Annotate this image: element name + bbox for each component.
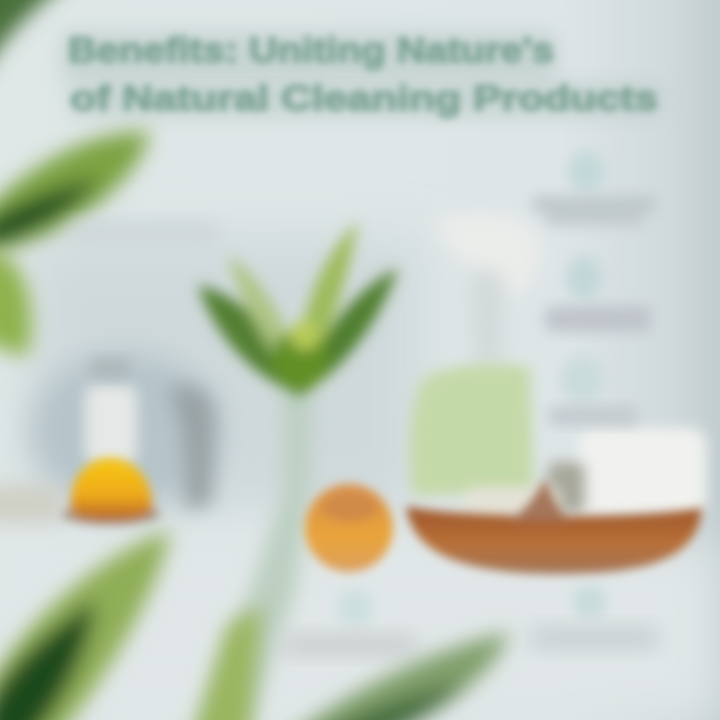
caption: upper left ghost text [70, 222, 220, 246]
title [62, 31, 660, 118]
caption: bottom right [530, 626, 660, 650]
bottle: left with lemon [0, 352, 220, 525]
leaf: bottom center [280, 632, 510, 720]
bottle body [410, 364, 534, 495]
leaf: top left [0, 0, 75, 85]
leaf: left edge [0, 250, 31, 355]
leaf: bottom left [0, 530, 170, 720]
icon: bottom center [338, 590, 372, 626]
right column: benefit list [532, 151, 657, 426]
bottom captions [282, 586, 660, 656]
caption: bottom center [282, 634, 417, 656]
icon: benefit 1 [568, 151, 604, 193]
wooden bowl [406, 478, 702, 574]
spray head [432, 214, 541, 296]
caption: benefit 1 [532, 196, 657, 226]
towels [465, 428, 706, 518]
leaf: upper left [0, 132, 150, 255]
caption: benefit 2 [545, 306, 651, 332]
icon: benefit 2 [566, 256, 602, 300]
bottle: grey background shape [168, 384, 214, 510]
plant stem [195, 385, 312, 720]
icon: lemon [60, 458, 160, 525]
title: Benefits: Uniting Nature's [68, 31, 554, 70]
spray bottle [410, 214, 541, 495]
plant: center aloe [192, 222, 398, 720]
caption: benefit 3 [548, 406, 638, 426]
jar: honey [305, 484, 393, 572]
icon: bottom right [574, 586, 606, 618]
icon: benefit 3 [560, 356, 604, 404]
plant leaves [198, 222, 398, 398]
title: of Natural Cleaning Products [70, 79, 658, 118]
